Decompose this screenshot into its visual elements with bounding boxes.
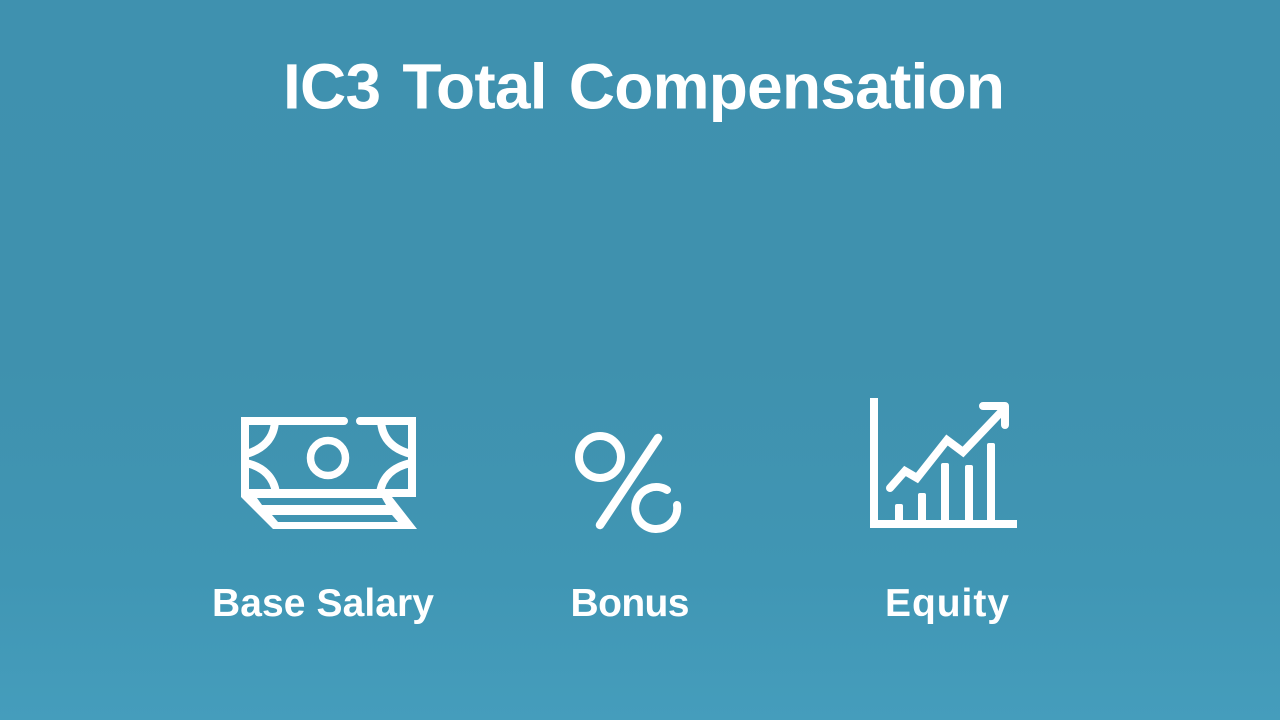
label: bonus: Bonus [570,582,690,625]
icon: growth chart [870,398,1017,528]
label: base salary: Base Salary [212,582,434,625]
label: equity: Equity [885,582,1009,625]
title: IC3 Total Compensation [283,50,1005,122]
icon: percent [579,436,677,529]
icon: banknote [241,421,417,529]
